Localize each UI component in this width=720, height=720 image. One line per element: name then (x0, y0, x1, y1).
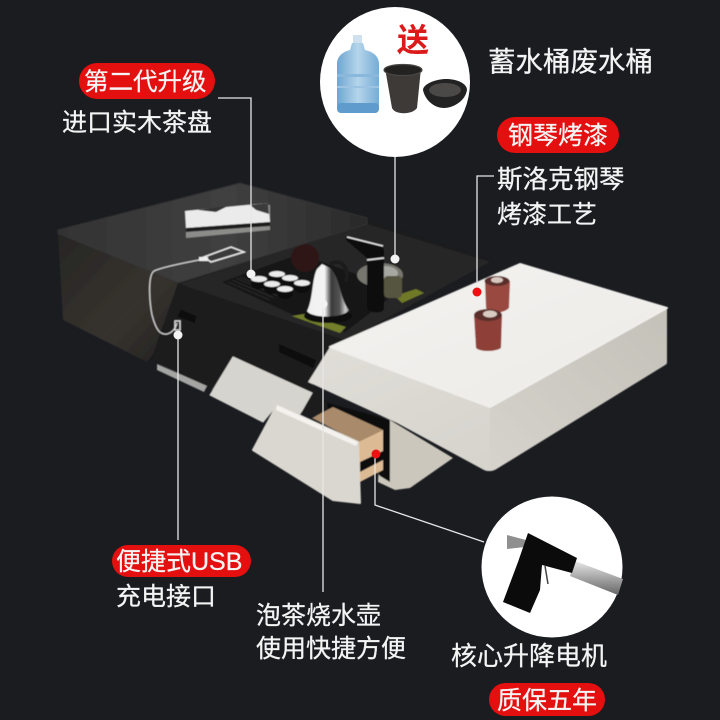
panel: motor circle (482, 496, 623, 638)
label pill (79, 63, 215, 99)
panel: open drawer 1 front (210, 357, 312, 422)
icon: steel kettle (304, 262, 352, 323)
callout: second generation (62, 63, 215, 137)
gift label: 送 (397, 22, 429, 58)
icon: lift rod (570, 561, 623, 595)
callout: kettle (256, 602, 406, 663)
icon: black bucket lid (423, 79, 467, 108)
heading: 钢琴烤漆 (508, 122, 608, 150)
icon: phone and usb cable (150, 247, 244, 334)
heading: water buckets: 蓄水桶废水桶 (488, 46, 653, 77)
callout lines and dots (174, 98, 494, 592)
warranty text: 质保五年 (497, 687, 597, 715)
description: 充电接口 (116, 583, 216, 611)
description line 1: 泡茶烧水壶 (256, 602, 381, 630)
label pill (497, 117, 619, 153)
description line 1: 斯洛克钢琴 (497, 166, 625, 194)
heading: 第二代升级 (84, 68, 206, 96)
icon: teapot (291, 244, 319, 272)
heading: 便捷式USB (116, 548, 242, 576)
icon: water faucet (346, 236, 384, 312)
panel: free gift circle (320, 7, 470, 157)
icon: tea cups (251, 271, 310, 299)
panel: white right module (308, 264, 667, 490)
callout: usb (112, 545, 251, 611)
label pill (489, 683, 605, 716)
panel: dark middle body (153, 220, 490, 420)
description line 2: 烤漆工艺 (497, 201, 597, 229)
description line 2: 使用快捷方便 (256, 635, 406, 663)
panel: dark left top cover (58, 183, 367, 362)
icon: motor body (503, 533, 577, 613)
icon: glass pot (357, 263, 403, 298)
panel: open drawer 2 (253, 403, 390, 503)
heading: 核心升降电机 (451, 641, 607, 671)
icon: books (185, 203, 270, 238)
callout: motor (451, 641, 607, 716)
icon: glasses with red drink (474, 276, 510, 351)
callout: piano paint (497, 117, 625, 229)
coffee table product illustration (58, 183, 667, 503)
label pill (112, 545, 251, 577)
panel: tea tray (180, 224, 490, 340)
icon: water jug (337, 35, 379, 113)
icon: black waste bucket (384, 64, 422, 113)
description: 进口实木茶盘 (62, 109, 212, 137)
